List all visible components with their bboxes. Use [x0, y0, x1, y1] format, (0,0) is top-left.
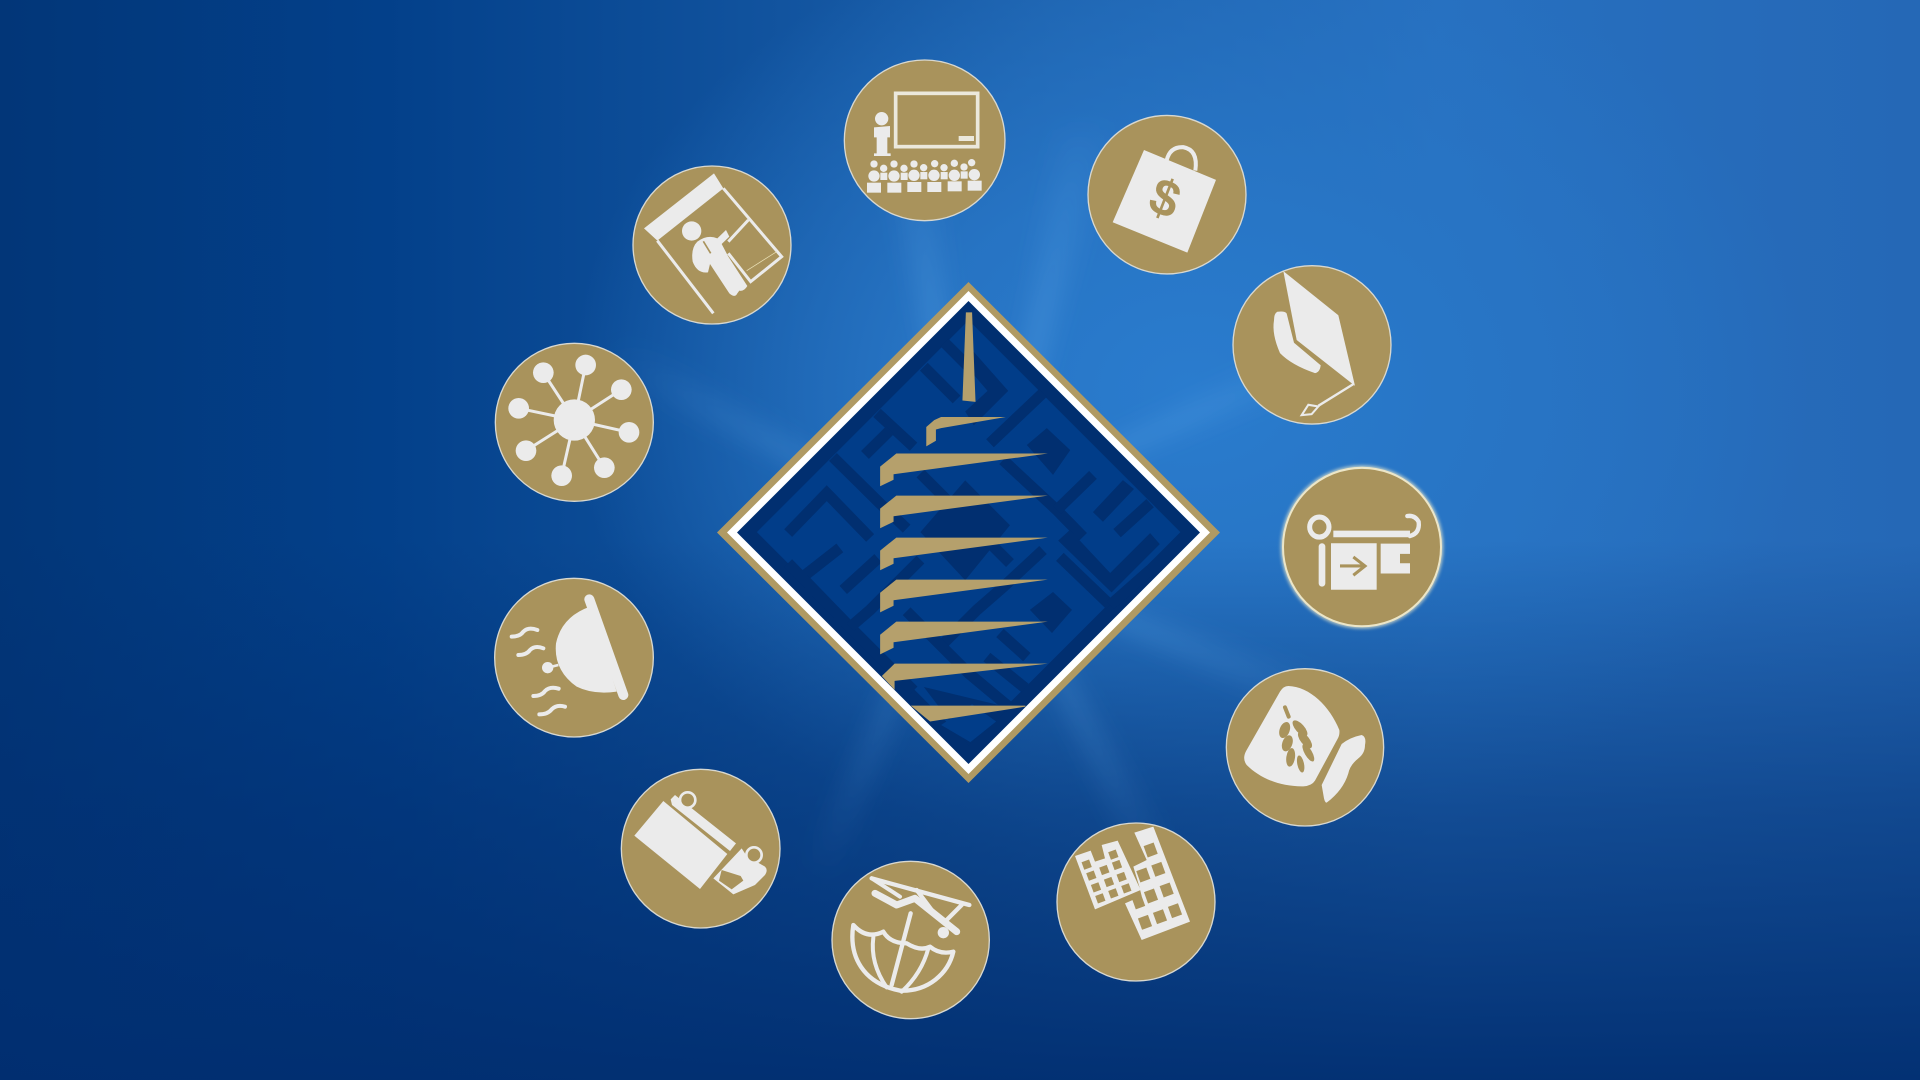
emblem: diamond tower logo	[717, 282, 1220, 783]
icon: graduation cap	[1233, 266, 1391, 424]
light rays behind emblem	[540, 120, 1520, 970]
icon: overturned truck	[621, 769, 780, 928]
icon: classroom audience	[844, 60, 1005, 221]
icon: network hub	[495, 343, 653, 501]
icon: shopping bag with dollar	[1088, 115, 1246, 274]
icon: shopping bag with dollar: $	[1142, 166, 1188, 230]
icon: city buildings	[1057, 823, 1215, 981]
icon: food cloche	[495, 578, 653, 737]
icon: beach lounger and umbrella	[832, 861, 989, 1019]
icon: hanging direction sign	[1281, 465, 1443, 629]
navy diamond field	[737, 301, 1200, 764]
icon: presenter at board	[633, 166, 791, 324]
tower bars	[880, 312, 1048, 721]
gold diamond frame	[717, 282, 1220, 783]
spire	[962, 312, 976, 402]
white diamond border	[727, 291, 1210, 774]
top bar	[926, 417, 1006, 446]
icon: wheat and bread	[1226, 669, 1384, 826]
floor bars	[880, 454, 1048, 721]
kufic pattern	[757, 320, 1180, 746]
